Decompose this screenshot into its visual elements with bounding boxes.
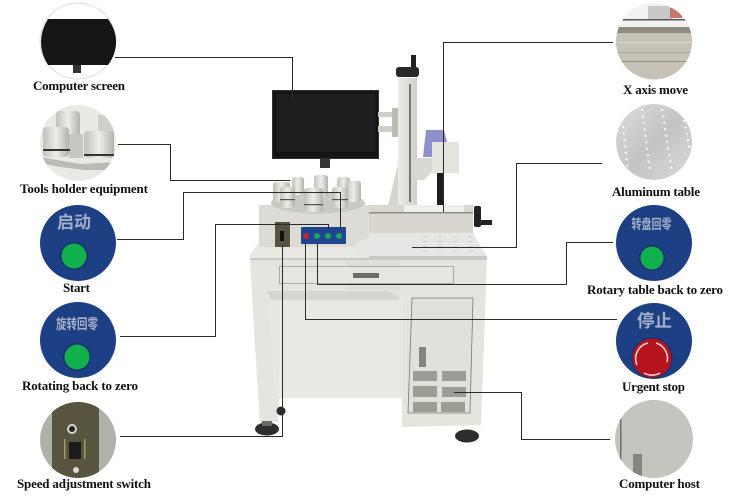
leader line: computer host [454, 392, 610, 440]
label: Rotary table back to zero [587, 282, 723, 297]
drawer [280, 266, 454, 284]
leader line: start [117, 192, 340, 240]
item: urgent stop [616, 303, 692, 394]
machine body [250, 256, 487, 427]
speed switch on machine [275, 222, 290, 247]
icon: cabinet door close-up [615, 400, 693, 478]
icon: monitor close-up [40, 3, 116, 79]
leader line: X axis [444, 42, 613, 212]
icon: green rotating button: 旋转回零 [56, 315, 98, 332]
cabinet door with vents [408, 298, 473, 413]
item: start [40, 205, 116, 295]
leader line: rotary table [318, 242, 613, 284]
item: tools holder [20, 105, 149, 196]
leader line: speed adjustment [120, 245, 282, 436]
icon: green start button: 启动 [57, 213, 91, 232]
label: Urgent stop [622, 379, 685, 394]
label: Rotating back to zero [22, 378, 138, 393]
laser head [415, 130, 459, 205]
label: Tools holder equipment [20, 181, 149, 196]
control panel [301, 227, 346, 244]
item: rotary table back to zero [587, 205, 723, 297]
label: Speed adjustment switch [17, 476, 152, 491]
label: Computer host [619, 476, 701, 491]
item: X axis move [616, 3, 692, 97]
leader line: aluminum table [412, 164, 602, 248]
leader line: urgent stop [306, 244, 617, 320]
leader line: tools holder [118, 144, 290, 180]
aluminum table hole rows [425, 236, 472, 252]
feet and caster [255, 406, 479, 442]
label: Start [63, 280, 91, 295]
icon: speed control plate [40, 402, 116, 478]
icon: X axis rail close-up [616, 3, 692, 80]
label: Aluminum table [612, 184, 700, 199]
table top [368, 233, 487, 256]
laser marking machine [250, 55, 492, 442]
icon: red stop button: 停止 [637, 311, 672, 331]
label: X axis move [623, 82, 688, 97]
monitor [272, 90, 398, 168]
label: Computer screen [33, 78, 126, 93]
icon: green rotary button: 转盘回零 [632, 216, 672, 232]
vertical column and knob [388, 55, 419, 207]
X axis rail and handwheel [369, 205, 492, 233]
icon: tool holders close-up [40, 105, 116, 181]
icon: perforated table close-up [616, 104, 692, 180]
leader line: rotating back to zero [120, 224, 328, 336]
item: aluminum table [612, 104, 700, 199]
item: speed adjustment switch [17, 402, 152, 491]
leader line: computer screen [115, 58, 292, 102]
item: computer screen [33, 3, 126, 93]
rotary tool holders [271, 175, 365, 214]
item: rotating back to zero [22, 302, 138, 393]
rotary housing [250, 205, 369, 258]
item: computer host [615, 400, 701, 491]
